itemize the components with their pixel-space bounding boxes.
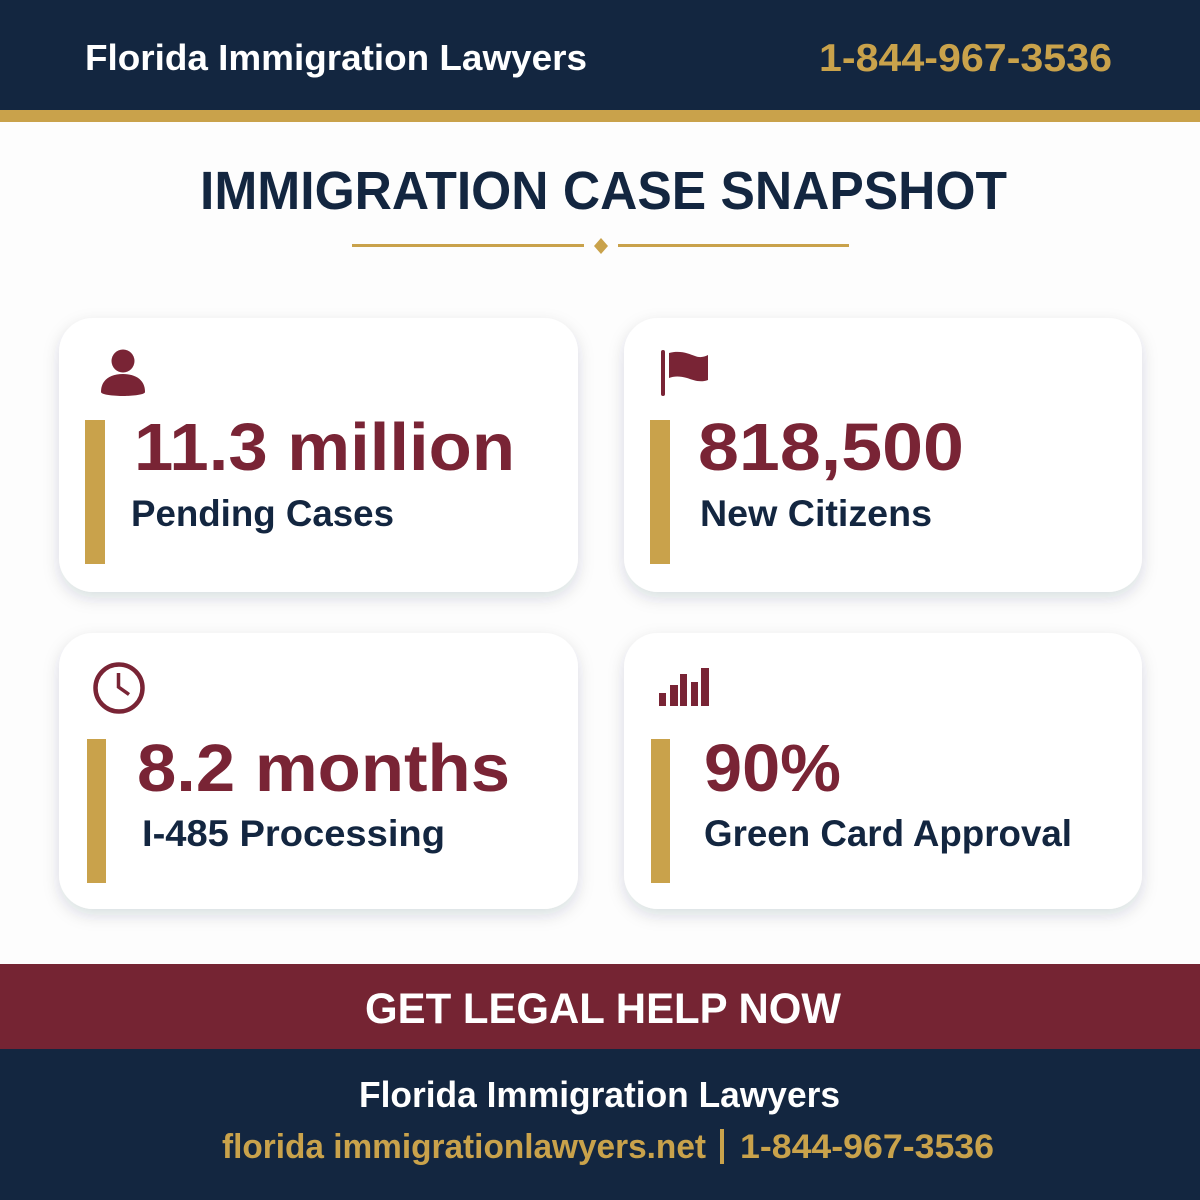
footer website and phone: 1-844-967-3536 [740, 1128, 994, 1166]
icon: person [101, 350, 145, 396]
stat value: 8.2 months [137, 731, 510, 806]
panel: new citizens [624, 318, 1142, 592]
icon: flag [661, 350, 708, 396]
panel: I-485 processing [59, 633, 578, 909]
title: IMMIGRATION CASE SNAPSHOT [200, 161, 1007, 221]
header bar [0, 0, 1200, 122]
stat label: New Citizens [700, 493, 932, 534]
stat value: 90% [704, 731, 841, 806]
panel: green card approval [624, 633, 1142, 909]
accent bar [87, 739, 106, 883]
call to action banner [0, 964, 1200, 1049]
accent bar [85, 420, 105, 564]
stat label: Green Card Approval [704, 813, 1072, 854]
stat value: 818,500 [698, 410, 964, 485]
stat label: I-485 Processing [142, 813, 445, 854]
icon: clock [96, 664, 142, 712]
accent bar [650, 420, 670, 564]
footer firm name: Florida Immigration Lawyers [359, 1074, 840, 1115]
footer website and phone: florida immigrationlawyers.net [222, 1128, 706, 1166]
footer [0, 1049, 1200, 1200]
header firm name: Florida Immigration Lawyers [85, 37, 587, 78]
accent bar [651, 739, 670, 883]
header phone number: 1-844-967-3536 [819, 37, 1112, 80]
panel: pending cases [59, 318, 578, 592]
stat label: Pending Cases [131, 493, 394, 534]
title divider [352, 238, 849, 254]
call to action text: GET LEGAL HELP NOW [365, 985, 841, 1033]
footer website and phone [222, 1128, 994, 1166]
stat value: 11.3 million [134, 410, 515, 485]
icon: bar chart [659, 668, 709, 706]
